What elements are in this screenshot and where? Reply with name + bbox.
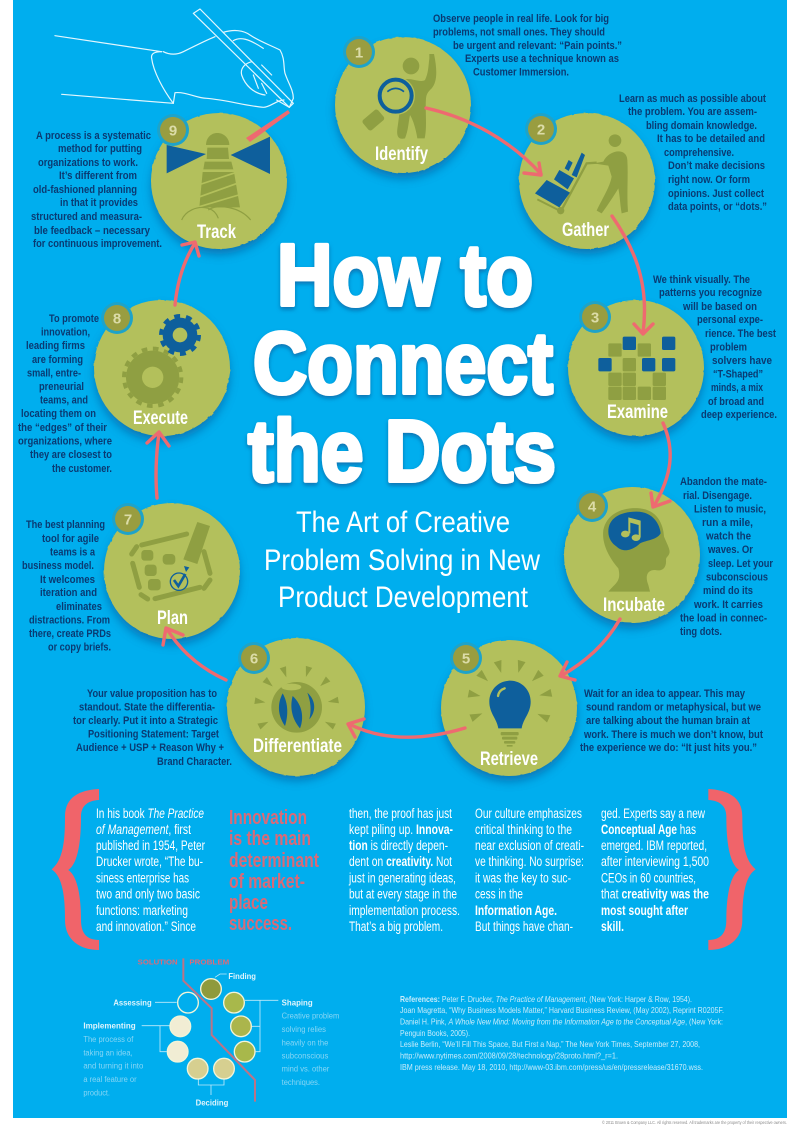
label: Shaping with description: heavily on the (282, 1038, 329, 1047)
text: step 4 description: waves. Or (707, 544, 754, 556)
text: step 9 description: A process is a systematic (36, 130, 151, 142)
step 3: Examine (568, 300, 704, 441)
title: How to (277, 227, 533, 324)
arrow: differentiate to plan (163, 628, 226, 680)
badge 7 (112, 503, 144, 535)
text: step 3 description: “T-Shaped” (713, 368, 763, 380)
essay column 5: skill. (601, 919, 624, 934)
right curly brace (708, 789, 756, 950)
badge 8 (101, 302, 133, 334)
badge 2 (525, 113, 557, 145)
text: step 9 description: method for putting (58, 143, 142, 155)
label: Implementing with description: taking an idea, (83, 1048, 133, 1057)
text: step 2 description: Learn as much as possible about (619, 93, 766, 105)
solution / problem divider: SOLUTION (138, 959, 178, 966)
label: Shaping with description: Creative problem (282, 1012, 340, 1021)
essay column 4: near exclusion of creati- (475, 838, 584, 853)
text: step 9 description (31, 130, 162, 250)
essay column 3: but at every stage in the (349, 886, 457, 902)
text: step 8 description: the customer. (52, 463, 112, 475)
subtitle: The Art of Creative (296, 506, 510, 539)
text: step 7 description: distractions. From (29, 614, 110, 626)
essay column 4: Our culture emphasizes (475, 806, 582, 821)
text: step 8 description (18, 313, 112, 475)
text: step 6 description: Your value proposition has to (87, 688, 217, 700)
essay column 4: cess in the (475, 886, 523, 902)
text: step 3 description: deep experience. (701, 409, 777, 421)
text: step 4 description: mind do its (703, 585, 753, 597)
label: Plan: Plan (157, 608, 188, 629)
text: step 3 description: problem (710, 342, 747, 354)
badge 6: 6 (250, 650, 258, 668)
pull quote: success. (229, 913, 292, 935)
step 7: Plan (104, 503, 240, 644)
essay column 1: published in 1954, Peter (96, 838, 205, 853)
essay column 4: Information Age. (475, 903, 557, 918)
text: step 9 description: ble feedback – necessary (34, 225, 151, 237)
text: step 2 description: opinions. Just collect (668, 188, 764, 200)
text: step 8 description: preneurial (39, 381, 84, 393)
text: step 2 description: right now. Or form (668, 174, 750, 186)
badge 4 (576, 490, 608, 522)
pull quote: Innovation (229, 807, 307, 829)
pull quote: of market- (229, 871, 305, 893)
title (248, 227, 556, 500)
text: step 8 description: leading firms (26, 340, 85, 352)
text: step 6 description: Audience + USP + Reason Why + (76, 742, 224, 754)
text: step 8 description: teams, and (40, 394, 88, 406)
essay column 4: critical thinking to the (475, 822, 572, 837)
essay column 1: Drucker wrote, “The bu- (96, 854, 203, 869)
label: Gather: Gather (562, 220, 609, 241)
text: step 5 description: work. There is much we don’t know, but (583, 729, 763, 741)
text: step 3 description: minds, a mix (711, 382, 764, 394)
label: Shaping with description: Shaping (282, 997, 313, 1007)
references: Daniel H. Pink, A Whole New Mind: Moving from the Information Age to the Conceptual Age, (New York: (400, 1016, 723, 1026)
text: step 8 description: are forming (32, 354, 83, 366)
pull quote: determinant (229, 850, 319, 872)
text: step 6 description: Brand Character. (157, 756, 232, 768)
references: Joan Magretta, “Why Business Models Matter,” Harvard Business Review, (May 2002), Reprint R0205F. (400, 1005, 724, 1015)
icon: head with brain and music note (603, 508, 670, 592)
text: step 8 description: organizations, where (18, 436, 112, 448)
essay column 3: just in generating ideas, (348, 870, 456, 886)
text: step 9 description: It’s different from (59, 170, 137, 182)
icon: gears (124, 316, 199, 406)
subtitle (264, 506, 540, 614)
arrow: retrieve to differentiate (348, 719, 465, 737)
text: step 3 description: personal expe- (697, 314, 763, 326)
text: step 3 description: patterns you recognize (659, 287, 762, 299)
text: step 3 description: of broad and (708, 396, 764, 408)
solution / problem divider: PROBLEM (189, 959, 230, 966)
essay column 3: That’s a big problem. (349, 919, 443, 934)
title: Connect (253, 315, 553, 412)
solution / problem divider (138, 958, 255, 1102)
left curly brace (52, 789, 99, 950)
essay column 1: and innovation.” Since (96, 919, 196, 934)
essay column 1: of Management, first (96, 822, 191, 837)
text: step 4 description: subconscious (706, 572, 768, 584)
arrow: track to pen tip (246, 110, 290, 142)
label: Implementing with description: and turning it into (83, 1062, 144, 1071)
creative process cycle diagram (83, 958, 340, 1107)
label: Track: Track (197, 222, 236, 243)
references: Penguin Books, 2005). (400, 1028, 470, 1038)
text: step 2 description: bling domain knowledge. (646, 120, 757, 132)
text: step 4 description (680, 476, 774, 638)
text: step 9 description: in that it provides (60, 197, 138, 209)
badge 4: 4 (588, 498, 597, 516)
references (400, 994, 724, 1072)
essay column 3: implementation process. (349, 903, 460, 918)
label: Implementing with description: a real feature or (83, 1075, 137, 1084)
references: References: Peter F. Drucker, The Practice of Management, (New York: Harper & Row, 1954). (400, 994, 692, 1004)
step 6: Differentiate (227, 638, 365, 780)
text: step 2 description: data points, or “dots.” (668, 201, 767, 213)
badge 8: 8 (113, 310, 121, 328)
essay column 5: CEOs in 60 countries, (601, 870, 696, 886)
text: step 6 description: Positioning Statement: Target (88, 728, 219, 740)
essay column 4: ve thinking. No surprise: (475, 854, 584, 869)
essay column 5: that creativity was the (601, 886, 709, 902)
references: IBM press release. May 18, 2010, http://www-03.ibm.com/press/us/en/pressrelease/31670.wss. (400, 1062, 703, 1072)
label: Incubate: Incubate (603, 595, 665, 616)
label: Shaping with description (282, 997, 340, 1087)
text: step 2 description: It has to be detailed and (657, 133, 765, 145)
step 4: Incubate (564, 487, 700, 628)
arrow: plan to execute (147, 432, 169, 498)
text: step 4 description: watch the (705, 530, 751, 542)
label: Retrieve: Retrieve (480, 749, 538, 770)
text: step 5 description (580, 688, 763, 754)
badge 7: 7 (124, 512, 132, 528)
label: Differentiate: Differentiate (253, 736, 342, 757)
badge 1 (343, 36, 375, 68)
label: Execute: Execute (133, 408, 188, 429)
step 5: Retrieve (441, 640, 577, 781)
references: http://www.nytimes.com/2008/09/28/technology/28proto.html?_r=1. (400, 1050, 618, 1060)
text: step 4 description: sleep. Let your (708, 558, 774, 570)
essay column 5 (601, 806, 709, 934)
essay column 1: two and only two basic (96, 886, 200, 902)
essay column 3: tion is directly depen- (349, 838, 448, 853)
text: step 9 description: structured and measura- (31, 211, 142, 223)
badge 5: 5 (462, 650, 470, 668)
badge 9: 9 (169, 122, 177, 140)
essay column 4 (475, 806, 584, 934)
text: step 2 description (619, 93, 767, 213)
essay column 5: after interviewing 1,500 (601, 854, 709, 869)
label: Examine: Examine (607, 402, 668, 423)
badge 2: 2 (537, 122, 545, 138)
badge 3 (579, 301, 611, 333)
text: step 4 description: rial. Disengage. (683, 490, 752, 502)
arrow: incubate to retrieve (560, 619, 620, 680)
text: step 7 description (22, 519, 111, 654)
essay column 1: In his book The Practice (96, 806, 204, 821)
essay column 1: functions: marketing (96, 903, 188, 918)
step 8: Execute (94, 300, 230, 441)
text: step 6 description: standout. State the differentia- (79, 702, 215, 714)
icon: person with magnifying glass (361, 54, 436, 139)
text: step 2 description: Don’t make decisions (668, 160, 765, 172)
label: Finding: Finding (228, 971, 256, 981)
essay column 4: it was the key to suc- (475, 870, 571, 886)
text: step 5 description: sound random or metaphysical, but we (586, 702, 761, 714)
icon: striped ball with rays (254, 666, 339, 733)
label: Deciding: Deciding (196, 1097, 228, 1107)
text: step 7 description: there, create PRDs (29, 628, 111, 640)
text: step 9 description: organizations to work. (38, 157, 138, 169)
label: Assessing: Assessing (113, 997, 152, 1007)
label: Implementing with description (83, 1021, 144, 1097)
essay column 1 (96, 806, 205, 934)
text: step 7 description: It welcomes (40, 574, 95, 586)
arrow: execute to track (175, 242, 199, 305)
essay column 5: ged. Experts say a new (601, 806, 705, 821)
badge 6 (238, 642, 270, 674)
subtitle: Product Development (278, 581, 529, 614)
text: step 1 description: be urgent and relevant: “Pain points.” (453, 40, 622, 52)
step 1: Identify (335, 36, 471, 178)
icon: grid of squares (598, 337, 675, 400)
label: Shaping with description: techniques. (282, 1078, 320, 1087)
icon: person with hand truck (535, 134, 628, 214)
essay column 5: most sought after (601, 903, 689, 918)
icon: light bulb with rays (468, 660, 552, 747)
icon: lighthouse (167, 133, 270, 220)
title: the Dots (248, 403, 556, 500)
icon: canvas with pencil and check (132, 522, 210, 599)
text: step 5 description: the experience we do: “It just hits you.” (580, 742, 757, 754)
text: step 3 description: solvers have (712, 355, 772, 367)
text: step 7 description: The best planning (26, 519, 105, 531)
text: step 4 description: Listen to music, (694, 504, 766, 516)
essay column 5: Conceptual Age has (601, 822, 696, 837)
text: step 8 description: the “edges” of their (18, 422, 108, 434)
text: step 5 description: are talking about the human brain at (586, 715, 750, 727)
arrow: identify to gather (426, 108, 541, 175)
essay column 3: kept piling up. Innova- (349, 822, 453, 837)
label: Identify: Identify (375, 144, 428, 165)
subtitle: Problem Solving in New (264, 544, 540, 577)
text: step 7 description: or copy briefs. (48, 642, 111, 654)
text: step 3 description (653, 274, 777, 421)
text: step 8 description: locating them on (21, 408, 96, 420)
text: step 6 description: tor clearly. Put it into a Strategic (73, 715, 218, 727)
text: step 8 description: To promote (49, 313, 99, 325)
hand drawing with pen (55, 9, 293, 107)
arrow: gather to examine (612, 216, 653, 334)
arrow: examine to incubate (651, 423, 670, 507)
text: step 3 description: will be based on (682, 301, 757, 313)
step 2: Gather (519, 113, 655, 254)
essay column 3: then, the proof has just (349, 806, 452, 821)
essay column 3 (348, 806, 460, 934)
essay column 4: But things have chan- (475, 919, 573, 934)
label: Shaping with description: solving relies (282, 1025, 326, 1034)
connector lines (142, 974, 278, 1095)
text: step 8 description: small, entre- (27, 368, 81, 380)
badge 5 (450, 642, 482, 674)
label: Implementing with description: product. (83, 1088, 110, 1097)
text: step 1 description: Experts use a technique known as (465, 53, 619, 65)
text: step 4 description: work. It carries (693, 599, 763, 611)
text: step 8 description: they are closest to (30, 449, 112, 461)
text: step 3 description: We think visually. The (653, 274, 750, 286)
references: Leslie Berlin, “We’ll Fill This Space, But First a Nap,” The New York Times, September 27, 2008, (400, 1039, 700, 1049)
text: step 4 description: the load in connec- (680, 612, 767, 624)
text: step 9 description: old-fashioned planning (33, 184, 137, 196)
text: step 4 description: run a mile, (702, 517, 753, 529)
essay column 5: emerged. IBM reported, (601, 838, 707, 853)
pull quote: place (229, 892, 268, 914)
text: step 4 description: ting dots. (680, 626, 722, 638)
label: Implementing with description: Implementing (83, 1021, 136, 1031)
essay column 3: dent on creativity. Not (349, 854, 452, 869)
text: step 9 description: for continuous improvement. (33, 238, 162, 250)
label: Shaping with description: mind vs. other (282, 1065, 330, 1074)
text: step 6 description (73, 688, 232, 768)
text: step 1 description (433, 13, 622, 78)
text: step 7 description: tool for agile (42, 533, 99, 545)
text: step 7 description: eliminates (56, 601, 102, 613)
step 9: Track (151, 113, 287, 254)
text: step 8 description: innovation, (41, 326, 90, 338)
badge 1: 1 (355, 44, 363, 62)
text: step 7 description: iteration and (40, 587, 97, 599)
text: step 1 description: Observe people in real life. Look for big (433, 13, 609, 25)
stage dots (167, 979, 255, 1079)
pull quote (229, 807, 319, 935)
badge 9 (157, 114, 189, 146)
text: step 1 description: Customer Immersion. (473, 66, 569, 78)
essay column 1: siness enterprise has (96, 870, 189, 886)
text: step 3 description: rience. The best (705, 328, 776, 340)
badge 3: 3 (591, 310, 599, 326)
pull quote: is the main (229, 828, 311, 850)
text: step 4 description: Abandon the mate- (680, 476, 767, 488)
text: step 1 description: problems, not small ones. They should (433, 26, 605, 38)
label: Shaping with description: subconscious (282, 1052, 328, 1061)
text: step 7 description: teams is a (50, 546, 96, 558)
text: step 2 description: the problem. You are assem- (628, 106, 757, 118)
text: step 7 description: business model. (22, 560, 94, 572)
label: Implementing with description: The process of (83, 1035, 134, 1044)
text: step 5 description: Wait for an idea to appear. This may (584, 688, 746, 700)
text: step 2 description: comprehensive. (664, 147, 734, 159)
